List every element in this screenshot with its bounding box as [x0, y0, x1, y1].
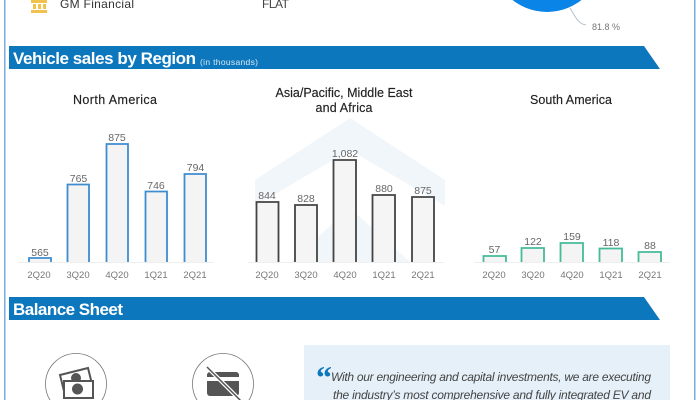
chart: South America — [482, 93, 662, 281]
chart: North America: 3Q20 — [66, 270, 90, 281]
chart: Asia/Pacific, Middle East and Africa: 4Q20 — [333, 270, 357, 281]
heading: South America: South America — [530, 93, 612, 107]
heading: Asia/Pacific, Middle East and Africa: and Africa — [316, 101, 373, 115]
chart: Asia/Pacific, Middle East and Africa: 1,082 — [332, 148, 358, 160]
section header: Vehicle sales by Region: (in thousands) — [200, 57, 258, 67]
chart: South America: 2Q20 — [482, 270, 506, 281]
chart: South America: 3Q20 — [521, 270, 545, 281]
financial row: GM Financial — [31, 0, 290, 13]
pie chart fragment — [492, 0, 620, 32]
chart: North America: 765 — [70, 173, 87, 185]
chart: North America: 4Q20 — [105, 270, 129, 281]
chart: Asia/Pacific, Middle East and Africa: 2Q20 — [255, 270, 279, 281]
chart: North America — [27, 93, 207, 281]
chart: South America: 122 — [524, 236, 542, 248]
chart: North America: 875 — [108, 132, 126, 144]
callout: quote — [304, 345, 670, 400]
chart: Asia/Pacific, Middle East and Africa: 2Q21 — [411, 270, 435, 281]
chart: South America: 1Q21 — [599, 270, 623, 281]
chart: North America: 746 — [147, 180, 165, 192]
section header: Balance Sheet — [9, 297, 660, 320]
icon: quotation mark: “ — [316, 359, 332, 395]
chart: South America: 159 — [563, 231, 581, 243]
heading: Asia/Pacific, Middle East and Africa — [276, 86, 413, 115]
chart: Asia/Pacific, Middle East and Africa: 3Q20 — [294, 270, 318, 281]
chart: North America: 2Q21 — [183, 270, 207, 281]
chart: Asia/Pacific, Middle East and Africa: 844 — [258, 190, 276, 202]
icon: GM Financial building — [31, 0, 47, 13]
baselines — [18, 262, 670, 263]
section header: Vehicle sales by Region — [9, 46, 660, 69]
chart: Asia/Pacific, Middle East and Africa: 880 — [375, 183, 393, 195]
chart: South America: 4Q20 — [560, 270, 584, 281]
chart: South America: 88 — [644, 240, 656, 252]
watermark: chevron — [255, 118, 445, 262]
heading: North America: North America — [73, 93, 157, 107]
callout: quote: With our engineering and capital investments, we are executing — [331, 370, 651, 384]
icon: no credit card — [192, 354, 254, 400]
chart: South America: 118 — [603, 237, 620, 249]
chart: North America: 565 — [31, 247, 49, 259]
icon: cash — [46, 354, 106, 400]
chart: Asia/Pacific, Middle East and Africa: 828 — [297, 193, 315, 205]
section header: Vehicle sales by Region: Vehicle sales by Region — [13, 49, 196, 68]
chart: South America: 57 — [489, 244, 500, 256]
chart: North America: 794 — [187, 162, 204, 174]
chart: Asia/Pacific, Middle East and Africa — [255, 86, 435, 281]
chart: North America: 2Q20 — [27, 270, 51, 281]
chart: South America: 2Q21 — [638, 270, 662, 281]
chart: Asia/Pacific, Middle East and Africa: 875 — [414, 185, 432, 197]
section header: Balance Sheet: Balance Sheet — [13, 300, 123, 319]
heading: Asia/Pacific, Middle East and Africa: Asia/Pacific, Middle East — [276, 86, 413, 100]
chart: Asia/Pacific, Middle East and Africa: 1Q21 — [372, 270, 396, 281]
pie chart fragment: 81.8 % — [592, 22, 620, 32]
chart: North America: 1Q21 — [144, 270, 168, 281]
